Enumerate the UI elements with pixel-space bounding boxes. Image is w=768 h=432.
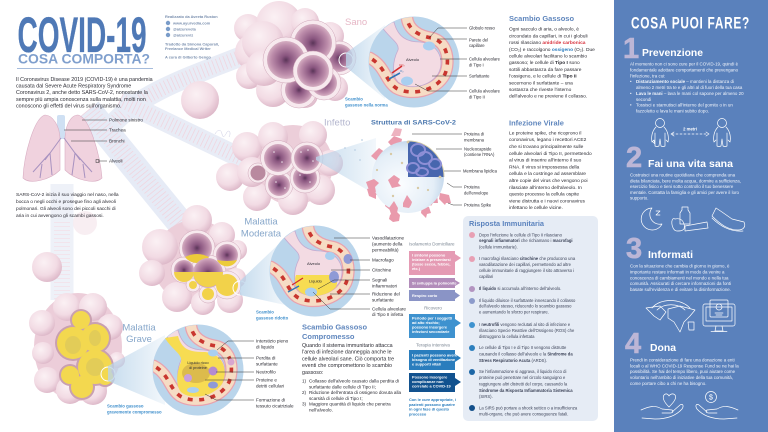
diagram: SARS-CoV-2 virus: Proteina Spike [464,202,492,208]
lungs diagram: Trachea [109,128,126,132]
credits: A cura di Gilberto Gengo [165,54,212,59]
diagram: SARS-CoV-2 virus [316,128,498,222]
flow: care pathway: possono insorgere [412,324,448,330]
panel: immune response: multi-organo, che può avere conseguenze fatali. [479,412,568,416]
heading: SARS-CoV-2 structure: Struttura di SARS-CoV-2 [371,120,456,126]
heading: moderate disease [241,216,282,240]
panel: immune response: Le cellule di Tipo I e di Tipo II vengono distrutte [479,345,567,350]
section 1: prevention: Al momento non ci sono cure per il COVID-19, quindi è [630,62,739,66]
icons: sleep, food, exercise [641,207,745,231]
panel: immune response: segnali infiammatori che richiamano i macrofagi [479,238,573,243]
panel: compromised gas exchange text: Collasso dell'alveolo causato dalla perdita di [309,378,399,384]
panel: immune response: (cellule immunitarie). [479,244,518,250]
detail: severe alveolus: surfattante [256,362,278,366]
detail: healthy alveolus: Globulo rosso [469,26,496,30]
panel: viral infection text [509,118,593,211]
heading: severe disease [122,322,156,345]
intro text: conoscono gli effetti del virus sull'organismo. [16,103,121,109]
section 1: prevention: • [630,79,632,84]
detail: severe alveolus: Neutrofilo [256,370,276,374]
detail: severe alveolus: Interstizio pieno [256,338,289,344]
diagram: SARS-CoV-2 virus: Nucleocapside [464,146,492,152]
section 1: prevention: Tossisci e starnutisci all'interno del gomito o in un [636,102,733,108]
panel: gas exchange text: rossi rilasciano anidride carbonica [509,41,585,46]
panel: compromised gas exchange text: 3) [302,402,307,407]
panel: gas exchange text: (CO₂) e raccolgono ossigeno (O₂). Due [509,48,595,53]
flow: care pathway: Si sviluppa la polmonite [412,280,457,286]
credits: www.ayurvedia.com [172,20,211,25]
icons: giving hands [641,392,738,419]
panel: compromised gas exchange text: 2) [302,390,307,395]
caption: severely compromised exchange [107,404,162,414]
lungs diagram: Bronchi [109,138,125,144]
text: SARS-CoV-2 journey: polmonari. Gli alveoli sono dei piccoli sacchi di [16,206,116,212]
flow: care pathway: I pazienti possono avere [412,352,458,358]
icons: world map and monitor [646,300,735,332]
section 4: donate: Dona [650,343,676,354]
detail: moderate alveolus: Vasodilatazione [372,236,405,240]
diagram: SARS-CoV-2 virus: Proteina di [464,132,484,136]
flow: care pathway: bisogno di ventilazione [412,357,456,362]
panel: compromised gas exchange text: gassoso: [302,370,323,376]
detail: healthy alveolus [346,12,501,108]
panel: immune response: raggiungere altri distretti del corpo, causando la [479,382,568,386]
panel: compromised gas exchange text: Riduzione dell'entrata di ossigeno dovuta alla [309,390,401,395]
panel: compromised gas exchange text: surfattante dalle cellule di Tipo II; [309,384,376,389]
panel: gas exchange text: sottili abbastanza da fare passare [509,67,582,73]
panel: what you can do [614,0,768,432]
alveoli cluster: severe disease [29,293,125,405]
alveoli cluster: healthy [234,1,356,108]
icon: two metres distance [652,118,730,146]
section 3: stay informed: Con la situazione che cambia di giorno in giorno, è [630,264,730,268]
lungs diagram: Alveoli [109,158,123,164]
detail: severe alveolus: Formazione di [256,398,285,402]
section 2: healthy life: 2 [626,142,642,174]
section 1: prevention: secondi [636,97,651,102]
caption: reduced gas exchange: gassoso ridotto [256,316,289,320]
detail: moderate alveolus: di Tipo II infetta [372,312,404,317]
section 3: stay informed: conoscenza di cambiamenti nel mondo e nella tua [630,276,729,280]
panel: gas exchange text: Ogni sacculo di aria, o alveolo, è [509,27,579,33]
section 2: healthy life [626,142,742,200]
panel: gas exchange text: gassoso; le cellule di Tipo I sono [509,61,580,66]
panel: compromised gas exchange text: l'area di infezione danneggia anche le [302,350,392,356]
panel: immune response: dell'alveolo stesso, riducendo lo scambio gassoso [479,304,572,308]
section 2: healthy life: supporto. [630,196,649,200]
section 1: prevention: fazzoletto e lava le mani subito dopo. [636,108,709,114]
section 4: donate: Prendi in considerazione di fare una donazione a enti [630,358,735,362]
caption: normal gas exchange [345,96,388,108]
panel: gas exchange text: Scambio Gassoso [509,14,574,23]
detail: severe alveolus: tessuto cicatriziale [256,404,294,408]
panel: gas exchange text: circondato da capillari, in cui i globuli [509,33,588,39]
panel: compromised gas exchange text: 1) [302,378,307,384]
detail: healthy alveolus: Surfattante [469,74,490,78]
panel: immune response: La SIRS può portare a shock settico o a insufficienza [479,406,578,410]
detail: healthy alveolus: O₂ [400,69,404,73]
flow: care pathway: infezioni secondarie [412,329,450,334]
flow: care pathway: processo [409,411,427,416]
section 1: prevention: fondamentale adottare comportamenti che prevengano [630,68,739,73]
panel: compromised gas exchange text: Maggiore quantità di liquido che penetra [309,402,391,407]
detail: severe alveolus: detriti cellulari [256,384,284,388]
intro text: Il Coronavirus Disease 2019 (COVID-19) è una pandemia [16,77,153,83]
panel: viral infection text: cellula e la costringe ad assemblare [509,171,586,177]
section 2: healthy life: Fai una vita sana [648,159,733,170]
panel: viral infection text: al virus di inserire all'interno il suo [509,158,582,164]
section 3: stay informed: basate sull'evidenza e di evitare la disinformazione. [630,287,731,292]
detail: moderate alveolus: Macrofago [372,258,394,262]
caption: normal gas exchange: Scambio [345,96,363,102]
panel: compromised gas exchange text: Quando il sistema immunitario attacca [302,343,393,349]
background: bronchial tubes [32,52,252,300]
section 1: prevention: l'infezione, tra cui: [630,74,665,78]
flow: care pathway: e supporti vitali [412,362,441,366]
heading: moderate disease: Moderata [241,228,282,240]
flow: care pathway: in ogni fase di questo [409,407,450,412]
detail: severe alveolus: Liquido ricco [187,361,209,365]
section 1: prevention: Prevenzione [642,48,703,59]
section 2: healthy life: dieta bilanciata, bere molta acqua, dormire a sufficienza, [630,178,741,184]
panel: gas exchange text: dell'alveolo e ne previene il collasso. [509,94,587,100]
flow: care pathway: Con le cure appropriate, i [409,397,456,402]
flow: care pathway: Respiro corto [412,293,438,298]
flow: care pathway: Terapia intensiva [416,342,450,348]
panel: immune response: Il liquido si accumula all'interno dell'alveolo. [479,286,561,291]
detail: healthy alveolus: capillare [469,43,485,48]
flow: care pathway: Ricovero [424,306,442,310]
panel: viral infection text: infettano le cellule vicine. [509,205,563,211]
panel: immune response: I neutrofili vengono reclutati al sito di infezione e [479,322,570,327]
section 3: stay informed: 3 [626,233,642,265]
section 1: prevention [623,33,745,114]
alveoli cluster: moderate disease [139,205,247,315]
panel: immune response: causando il collasso dell'alveolo e la Sindrome da [479,352,573,356]
diagram: SARS-CoV-2 virus: membrana [464,138,485,142]
panel: immune response: capillari [479,274,493,279]
panel: viral infection text: altre copie del virus che vengono poi [509,178,588,184]
detail: moderate alveolus: Cellula alveolare [372,306,406,312]
caption: severely compromised exchange: Scambio gassoso [107,404,144,408]
section 4: donate: locali o al WHO COVID-19 Response Fund se ne hai la [630,364,739,368]
title: COSA COMPORTA? [18,52,150,66]
text: SARS-CoV-2 journey: SARS-CoV-2 inizia il suo viaggio nel naso, nella [16,192,119,198]
heading: Infetto: Infetto [324,118,350,128]
detail: moderate alveolus: Segnali [372,278,387,282]
icon: two metres distance: 2 metri [683,126,697,132]
section 4: donate: come portare cibo a chi ne ha bisogno. [630,381,706,386]
section 1: prevention: 1 [623,33,639,65]
credits: Tradotto da Simona Caporali, [165,41,219,46]
caption: normal gas exchange: gassoso nella norma [345,102,388,108]
panel: gas exchange text: cellule alveolari facilitano lo scambio [509,54,587,60]
panel: immune response: Dopo l'infezione le cellule di Tipo II rilasciano [479,232,563,238]
intro text: Coronavirus 2, anche detto SARS-CoV-2, nonostante la [16,90,148,96]
caption: reduced gas exchange: Scambio [256,310,274,314]
panel: immune response: Sindrome da Risposta Infiammatoria Sistemica [479,388,573,393]
flow: care pathway: (tosse secca, febbre, [412,262,450,266]
detail: moderate alveolus: Citochine [372,268,392,272]
panel: compromised gas exchange text: scarsità di cellule di Tipo I; [309,396,363,401]
diagram: SARS-CoV-2 virus: (contiene l'RNA) [464,152,495,157]
panel: compromised gas exchange text: eventi che compromettono lo scambio [302,363,392,369]
credits: Freelance Medical Writer [165,46,211,51]
panel: immune response: distruggono la cellula infettata [479,334,535,339]
section 4: donate [625,328,740,386]
diagram: SARS-CoV-2 virus: Membrana lipidica [463,168,498,174]
section 4: donate: 4 [625,328,641,360]
heading: moderate disease: Malattia [244,216,278,228]
icons: giving hands: $ [709,394,713,402]
panel: compromised gas exchange text: Compromesso [302,332,355,341]
caption: severely compromised exchange: gravemente compromesso [107,410,162,414]
detail: moderate alveolus: Riduzione del [372,292,400,296]
section 1: prevention: Distanziamento sociale – mantieni la distanza di [636,79,734,84]
section 4: donate: possibilità. Se hai del tempo libero, puoi aiutare come [630,369,736,374]
panel: gas exchange text: l'ossigeno, e le cellule di Tipo II [509,75,577,80]
heading: severe disease: Malattia [122,322,156,334]
section 1: prevention: • [630,102,632,108]
flow: care pathway: complicanze non [412,379,444,384]
heading: Sano: Sano [345,17,367,28]
detail: moderate alveolus: infiammatori [372,284,397,288]
panel: immune response: Il liquido diluisce il surfattante innescando il collasso [479,298,576,303]
panel: viral infection text: questo processo la cellula ospite [509,192,579,198]
detail: severe alveolus: di proteine [189,366,207,370]
panel: immune response: rilasciano Specie Reattive dell'Ossigeno (ROS) che [479,328,575,333]
panel: immune response: vasodilatazione dei capillari, permettendo ad altre [479,262,572,267]
title: COVID-19 [18,6,147,63]
panel: immune response [463,216,598,421]
panel: viral infection text: Infezione Virale [509,118,564,128]
credits: @aizureveta [173,26,197,31]
flow: care pathway: iniziare a presentarsi [412,257,451,262]
credits: @aizureviz [173,32,193,37]
panel: immune response: Risposta Immunitaria [469,219,545,228]
section 3: stay informed: comunità. Assicurati di cercare informazioni da fonti [630,281,731,286]
section 2: healthy life: Costruisci una routine quotidiana che comprenda una [630,172,736,178]
flow: care pathway: Periodo per i soggetti [412,316,452,320]
section 1: prevention: • [630,91,632,96]
detail: healthy alveolus: di Tipo II [469,94,485,100]
panel: viral infection text: coronavirus, legano i recettori ACE2 [509,137,587,143]
detail: healthy alveolus: Cellula alveolare [469,88,501,94]
panel: immune response: proteine può penetrare nel circolo sanguigno e [479,375,566,380]
detail: moderate alveolus: permeabilità) [372,248,399,252]
panel: viral infection text: cellule alveolari di Tipo II, permettendo [509,151,592,157]
credits: Realizzato da Aveeta Ruston [165,14,218,19]
panel: viral infection text: RNA. Il virus si impossessa della [509,164,580,170]
panel: gas exchange text: sostanza che riveste l'interno [509,87,572,93]
detail: moderate alveolus [240,221,406,317]
panel: gas exchange text: secernono il surfattante – una [509,80,573,86]
detail: healthy alveolus: CO₂ [399,63,406,67]
section 2: healthy life: esercizio fisico e tieni sotto controllo il tuo benessere [630,184,734,189]
panel: compromised gas exchange text: Scambio Gassoso [302,322,367,332]
section 1: prevention: almeno 2 metri tra te e gli altri al di fuori della tua casa [636,85,743,90]
panel: compromised gas exchange text [302,322,402,412]
intro text: sempre più ampia conoscenza sulla malattia, molti non [16,97,146,103]
intro text: causata dal Severe Acute Respiratory Syndrome [16,84,131,90]
text: SARS-CoV-2 journey: aria in cui avvengono gli scambi gassosi. [16,213,104,219]
section 1: prevention: Lava le mani – lava le mani col sapone per almeno 20 [636,91,744,96]
section 3: stay informed: Informati [648,250,693,261]
credits [165,14,219,59]
panel: immune response: I macrofagi rilasciano citochine che producono una [479,256,575,261]
detail: severe alveolus: Perdita di [256,356,275,360]
detail: moderate alveolus: (aumento della [372,242,403,246]
panel: immune response: cellule immunitarie di raggiungere il sito attraverso i [479,268,574,273]
detail: healthy alveolus: Alveolo [406,57,420,62]
flow: care pathway: ad alto rischio; [412,320,440,325]
section 4: donate: volontario nell'ambito di iniziative della tua comunità, [630,375,733,380]
panel: viral infection text: rilasciate all'interno dell'alveolo. In [509,185,582,191]
panel: immune response: e aumentando lo sforzo per respirare. [479,310,549,314]
section 3: stay informed: importante restare informati in modo da venire a [630,270,725,274]
detail: moderate alveolus: surfattante [372,298,394,302]
heading: severe disease: Grave [126,334,152,345]
flow: care pathway [409,242,461,416]
panel: compromised gas exchange text: cellule alveolari sane. Ciò comporta tre [302,356,394,362]
flow: care pathway: I sintomi possono [412,252,446,258]
flow: care pathway: pazienti possono guarire [409,402,456,407]
diagram: SARS-CoV-2 virus: Proteina [464,184,480,190]
lungs diagram [23,115,143,181]
flow: care pathway: Possono insorgere [412,374,448,380]
panel: viral infection text: che si trovano principalmente sulle [509,144,584,150]
caption: reduced gas exchange [256,310,289,320]
detail: healthy alveolus: Parete del [469,38,488,42]
panel: immune response: Stress Respiratorio Acuta (ARDS). [479,358,547,363]
detail: severe alveolus [108,320,294,416]
panel: gas exchange text [509,14,596,100]
section 3: stay informed [626,233,732,292]
lungs diagram: Polmone sinistro [109,118,143,122]
text: SARS-CoV-2 journey: bocca o negli occhi e prosegue fino agli alveoli [16,199,116,205]
panel: compromised gas exchange text: nell'alveolo. [309,408,333,412]
diagram: SARS-CoV-2 virus: dell'envelope [464,190,489,196]
detail: healthy alveolus: di Tipo I [469,62,484,68]
panel: immune response: Se l'infiammazione si aggrava, il liquido ricco di [479,369,566,374]
flow: care pathway: Isolamento Domiciliare [409,242,455,246]
alveoli cluster: infected [216,121,343,215]
panel: viral infection text: viene distrutta e i nuovi coronavirus [509,198,586,204]
detail: severe alveolus: Proteine e [256,378,277,382]
detail: moderate alveolus: Liquido [309,278,323,284]
detail: moderate alveolus: Alveolo [307,261,321,266]
panel: viral infection text: Le proteine spike, che ricoprono il [509,130,581,136]
flow: care pathway: correlate a COVID-19 [412,384,452,388]
detail: severe alveolus: di liquido [256,344,275,350]
panel: immune response: (SIRS). [479,394,493,399]
flow: care pathway: etc.) [412,266,421,271]
detail: healthy alveolus: Cellula alveolare [469,56,501,62]
section 2: healthy life: mentale. Contatta la famiglia e gli amici per avere il loro [630,190,740,195]
